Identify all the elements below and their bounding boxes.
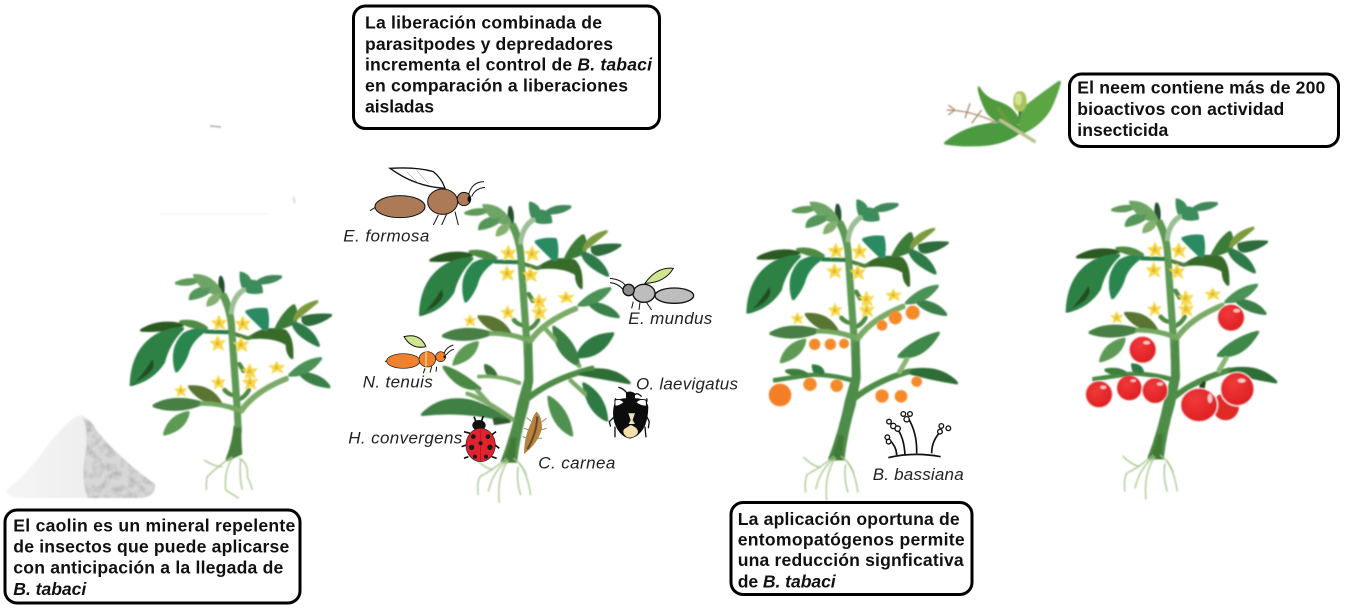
callout: parasitoides y depredadores: incrementa el control de B. tabaci [365,55,653,75]
callout: neem: El neem contiene más de 200 [1077,77,1326,97]
callout: neem: insecticida [1077,120,1169,140]
callout: parasitoides y depredadores: aisladas [365,97,434,117]
insect: O. laevigatus [609,387,649,439]
icon: neem branch [945,82,1060,145]
insect: H. convergens ladybug [462,416,499,462]
callout: caolin: de insectos que puede aplicarse [13,537,290,557]
label: C. carnea: C. carnea [538,453,615,472]
faint image residue [160,126,295,214]
plant 2: tomato plant with natural enemies [420,203,630,503]
label: O. laevigatus: O. laevigatus [636,374,738,393]
callout: entomopatogenos: una reducción signficativa [738,550,964,570]
label: N. tenuis: N. tenuis [363,372,433,391]
insect: N. tenuis [385,336,454,377]
plant 4: tomato plant with ripe fruit [1067,199,1277,499]
insect: E. mundus [610,268,694,310]
callout: parasitoides y depredadores: parasitpodes y depredadores [365,34,613,54]
callout: parasitoides y depredadores: La liberación combinada de [365,12,602,32]
icon: B. bassiana fungus [885,412,951,458]
callout: caolin [5,510,300,603]
label: B. bassiana: B. bassiana [873,465,964,484]
callout: entomopatogenos: entomopatógenos permite [738,530,965,550]
insect: E. formosa [370,168,485,225]
insect: C. carnea larva [523,412,547,454]
callout: entomopatogenos [731,502,972,594]
callout: entomopatogenos: La aplicación oportuna de [738,509,960,529]
callout: parasitoides y depredadores: en comparación a liberaciones [365,76,628,96]
label: H. convergens: H. convergens [348,428,463,447]
kaolin powder pile [6,415,155,498]
callout: entomopatogenos: de B. tabaci [738,571,837,591]
callout: parasitoides y depredadores [354,6,660,128]
callout: neem: bioactivos con actividad [1077,99,1284,119]
callout: neem [1070,74,1338,146]
plant 1: young tomato plant [131,273,331,498]
plant 3: tomato plant with green fruit [747,200,957,500]
label: E. mundus: E. mundus [628,309,713,328]
label: E. formosa: E. formosa [343,227,429,246]
callout: caolin: con anticipación a la llegada de [13,558,284,578]
callout: caolin: B. tabaci [13,579,87,599]
callout: caolin: El caolin es un mineral repelente [13,516,296,536]
